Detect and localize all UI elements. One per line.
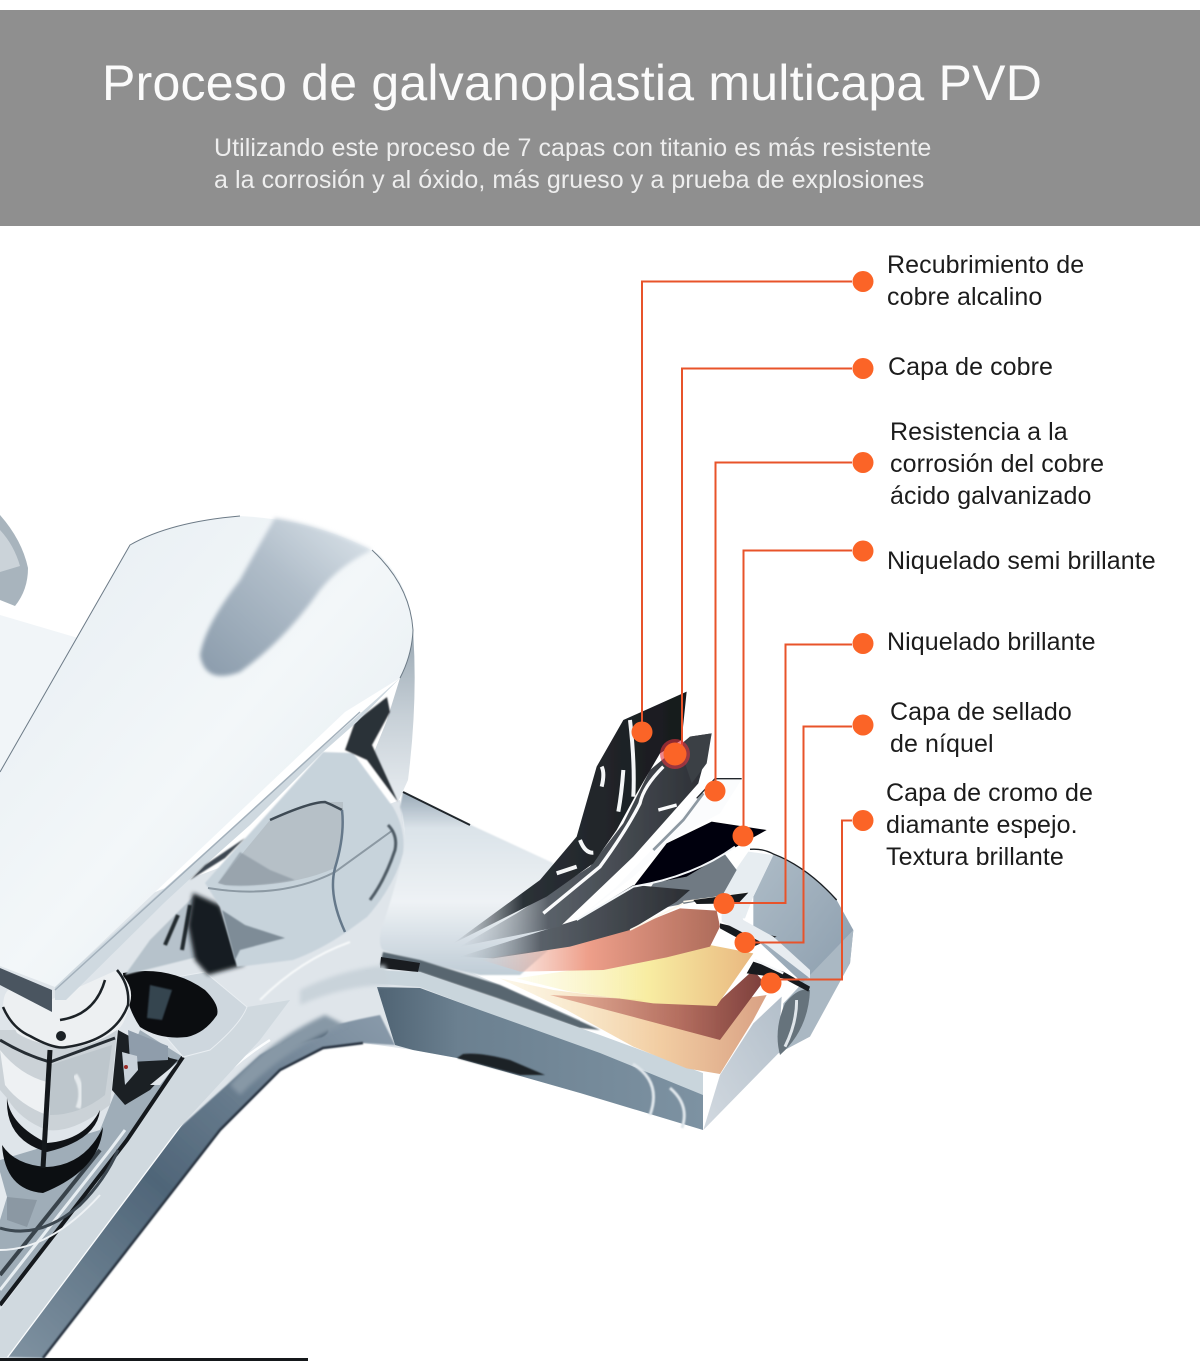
label: Niquelado brillante: Niquelado brillante	[887, 628, 1096, 656]
cap highlight	[722, 852, 773, 918]
faucet: rear body block	[0, 615, 78, 780]
faucet: deck reflections	[7, 942, 390, 1358]
faucet: dark interior behind dome	[188, 893, 244, 975]
callout line 3	[716, 462, 852, 790]
bottom black rule	[0, 1358, 308, 1361]
brown layer	[550, 970, 763, 1040]
label: Capa de cromo: diamante espejo.	[886, 811, 1078, 839]
label: Recubrimiento: cobre alcalino	[887, 283, 1042, 311]
subtitle text	[214, 134, 931, 194]
label: Capa de sellado: de níquel	[890, 730, 994, 758]
spout cap	[753, 855, 853, 990]
leaf 4 black	[633, 822, 767, 887]
faucet: rear lever	[0, 515, 28, 606]
faucet: handle dark edge	[0, 968, 52, 1012]
leaf 1 black	[453, 692, 687, 943]
label: Resistencia: ácido galvanizado	[890, 482, 1092, 510]
leaf 3 outline	[697, 779, 742, 798]
faucet: deck light band	[0, 1000, 290, 1357]
faucet: spout dark strip	[380, 952, 600, 1030]
faucet: spout black strip end	[380, 957, 420, 972]
leaf 2 dark core	[670, 733, 712, 783]
label: Resistencia	[890, 418, 1104, 510]
aerator ring	[778, 989, 810, 1055]
label: Capa de sellado	[890, 698, 1072, 758]
yellow layer	[517, 945, 753, 1006]
leaf 3 shading	[653, 793, 703, 850]
silver sliver	[722, 912, 810, 978]
subtitle text: a la corrosión y al óxido, más grueso y a prueba de explosiones	[214, 166, 924, 194]
salmon layer	[480, 908, 720, 972]
callout line 7	[771, 820, 852, 980]
red halo around second layer dot	[660, 739, 690, 769]
callout line 1	[642, 282, 852, 732]
faucet: deck inner pocket	[0, 1030, 183, 1307]
metal base behind leaves	[633, 850, 737, 913]
label: Niquelado semi brillante: Niquelado semi brillante	[887, 547, 1156, 575]
leaf 2 highlight	[543, 767, 677, 913]
label: Resistencia: Resistencia a la	[890, 418, 1068, 446]
subtitle text: Utilizando este proceso de 7 capas con titanio es más resistente	[214, 134, 931, 162]
title: Proceso de galvanoplastia multicapa PVD	[102, 55, 1042, 111]
callout line 4	[744, 550, 852, 835]
faucet: handle top surface	[0, 516, 413, 987]
faucet: handle bevel	[55, 678, 400, 1000]
label: Capa de cobre: Capa de cobre	[888, 353, 1053, 381]
faucet: lower body base silhouette	[0, 800, 580, 1358]
layer dots	[632, 722, 782, 994]
callout line 6	[745, 726, 852, 942]
spout lower wedge	[703, 997, 782, 1130]
label: Capa de sellado: Capa de sellado	[890, 698, 1072, 726]
aerator highlight	[785, 1000, 797, 1047]
label: Recubrimiento	[887, 251, 1084, 311]
faucet: chrome stem behind handle	[125, 895, 205, 975]
faucet: spout top edge	[403, 792, 470, 825]
callout line 5	[724, 644, 852, 903]
cap top outline	[750, 849, 837, 900]
faucet: valve hole plate	[130, 972, 247, 1057]
faucet: valve hole	[123, 971, 218, 1038]
leaf 2 grey	[460, 733, 712, 947]
faucet: cylinder cartridge	[0, 970, 131, 1227]
faucet: spout upper surface	[380, 792, 560, 975]
thin metal layers near spout	[630, 893, 747, 930]
edge white line	[755, 960, 783, 973]
faucet: deck outer dark band	[7, 1015, 395, 1358]
label: Capa de cromo	[886, 779, 1093, 871]
callout line 2	[682, 368, 852, 752]
leaf 3 white	[577, 779, 742, 920]
leaf 4 highlight	[577, 847, 735, 920]
spout front face	[778, 930, 853, 1053]
label: Capa de cromo: Capa de cromo de	[886, 779, 1093, 807]
dark tail under leaves	[460, 885, 690, 958]
faucet: spout lip and inset panel	[365, 970, 703, 1130]
faucet: handle side band	[345, 630, 415, 802]
handle groove	[200, 518, 372, 676]
label dots	[852, 271, 874, 831]
spout end details, drawn in a 3x coordinate frame	[453, 692, 853, 1130]
label: Capa de cromo: Textura brillante	[886, 843, 1064, 871]
label: Resistencia: corrosión del cobre	[890, 450, 1104, 478]
peach layer	[500, 978, 767, 1074]
label: Recubrimiento: Recubrimiento de	[887, 251, 1084, 279]
dark slivers	[693, 893, 810, 992]
faucet: dome under handle	[205, 752, 404, 967]
leaf 1 reflections	[557, 720, 634, 873]
header band	[0, 10, 1200, 226]
faucet: mechanism below hole	[112, 1030, 178, 1105]
